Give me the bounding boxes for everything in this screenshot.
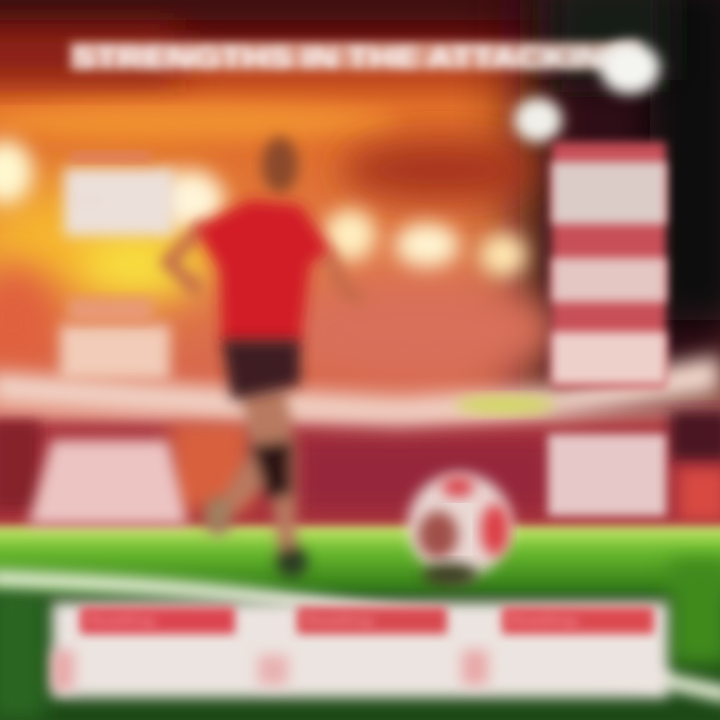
column header 3: Heading	[506, 610, 577, 630]
panel: left bottom	[28, 440, 188, 525]
player shirt	[195, 200, 330, 345]
panel: right bottom	[548, 434, 666, 516]
panel: right bottom: Panel	[575, 467, 606, 481]
panel: left top	[64, 152, 174, 236]
panel: left middle	[60, 298, 170, 380]
column header 2	[297, 607, 447, 634]
player	[168, 137, 362, 578]
column header 3	[502, 607, 654, 634]
panel: bottom table	[52, 602, 668, 698]
player shorts	[222, 340, 300, 400]
column header 1: Heading	[84, 610, 155, 630]
panel: right stack	[552, 142, 666, 388]
row markers	[52, 650, 488, 690]
panel: left top: Panel	[72, 194, 103, 208]
panel: right stack: Panel	[575, 184, 606, 198]
title: STRENGTHS IN THE ATTACKING	[72, 40, 632, 75]
player legs	[204, 385, 308, 578]
panel: right stack: Panel	[575, 271, 606, 285]
white band across the stadium	[0, 355, 720, 425]
football	[408, 473, 512, 587]
panel: left middle: Panel	[72, 304, 103, 318]
player arms	[168, 225, 362, 300]
white glow spots: top right	[514, 42, 660, 142]
column header 2: Heading	[302, 610, 373, 630]
panel: left bottom: Panel	[80, 479, 111, 493]
player head	[262, 137, 298, 193]
stands lower tier	[0, 410, 720, 530]
pitch	[0, 527, 720, 720]
yellow-green band highlight	[455, 396, 555, 414]
panel: right stack: Panel	[575, 349, 606, 363]
column header 1	[80, 607, 235, 634]
